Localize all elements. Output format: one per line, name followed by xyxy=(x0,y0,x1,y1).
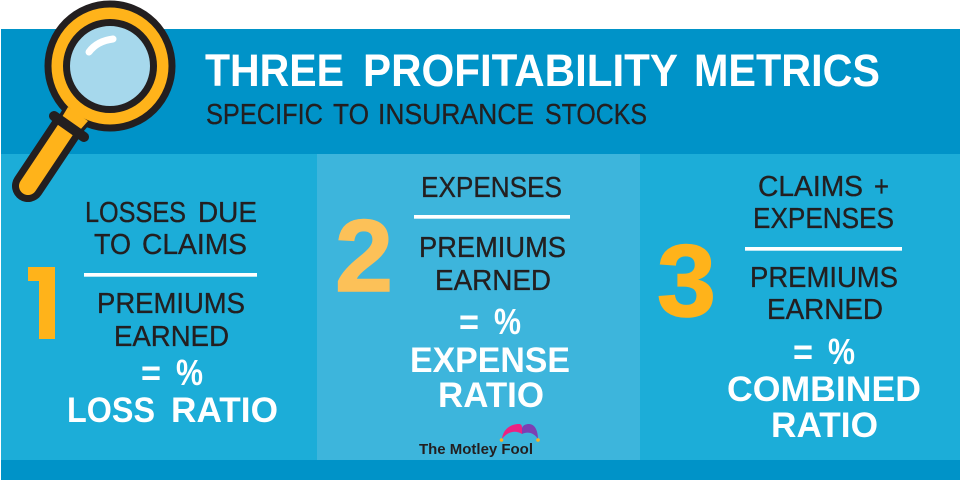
denominator: PREMIUMS xyxy=(97,288,245,320)
number 3: 3 xyxy=(657,224,716,338)
denominator: PREMIUMS xyxy=(750,262,898,294)
numerator: EXPENSES xyxy=(753,203,894,235)
result: LOSS xyxy=(67,391,155,430)
denominator: EARNED xyxy=(435,265,551,297)
equals percent: = xyxy=(141,352,161,393)
equals percent: % xyxy=(494,301,521,342)
denominator: EARNED xyxy=(767,294,883,326)
subtitle: INSURANCE xyxy=(378,99,534,131)
numerator xyxy=(85,197,257,261)
result: EXPENSE xyxy=(410,341,570,380)
result: RATIO xyxy=(171,391,278,430)
icon: magnifying glass xyxy=(28,4,172,186)
numerator: EXPENSES xyxy=(421,172,562,204)
numerator: + xyxy=(874,171,889,203)
equals percent xyxy=(141,352,203,393)
denominator xyxy=(750,262,898,326)
title: METRICS xyxy=(694,45,880,96)
result: COMBINED xyxy=(727,370,921,409)
logo: The Motley Fool xyxy=(419,424,540,458)
equals percent: = xyxy=(793,331,813,372)
denominator xyxy=(419,232,566,297)
numerator: DUE xyxy=(198,197,257,229)
denominator: PREMIUMS xyxy=(419,232,566,264)
result: RATIO xyxy=(438,376,544,415)
subtitle xyxy=(206,99,647,131)
panel: expense ratio xyxy=(317,154,640,460)
logo: The Motley Fool: The Motley Fool xyxy=(419,442,533,458)
numerator xyxy=(753,171,894,235)
denominator: EARNED xyxy=(114,321,229,353)
denominator xyxy=(97,288,245,353)
equals percent xyxy=(459,301,521,342)
number 2: 2 xyxy=(335,199,393,313)
equals percent xyxy=(793,331,855,372)
result xyxy=(727,370,921,445)
numerator: CLAIMS xyxy=(758,171,863,203)
result xyxy=(410,341,570,415)
numerator: LOSSES xyxy=(85,197,186,229)
equals percent: = xyxy=(459,301,479,342)
bottom band xyxy=(1,460,960,480)
panel: combined ratio xyxy=(640,154,960,460)
header band xyxy=(1,29,960,154)
subtitle: STOCKS xyxy=(545,99,647,131)
title xyxy=(205,45,880,96)
title: THREE xyxy=(205,45,344,96)
subtitle: SPECIFIC xyxy=(206,99,323,131)
equals percent: % xyxy=(828,331,855,372)
subtitle: TO xyxy=(333,99,369,131)
number 1: 1 xyxy=(8,245,66,362)
equals percent: % xyxy=(176,352,203,393)
numerator: CLAIMS xyxy=(142,229,247,261)
title: PROFITABILITY xyxy=(363,45,678,96)
result xyxy=(67,391,278,430)
result: RATIO xyxy=(771,406,878,445)
panel: loss ratio xyxy=(1,154,317,460)
jester hat xyxy=(500,424,540,442)
numerator: TO xyxy=(94,229,131,261)
